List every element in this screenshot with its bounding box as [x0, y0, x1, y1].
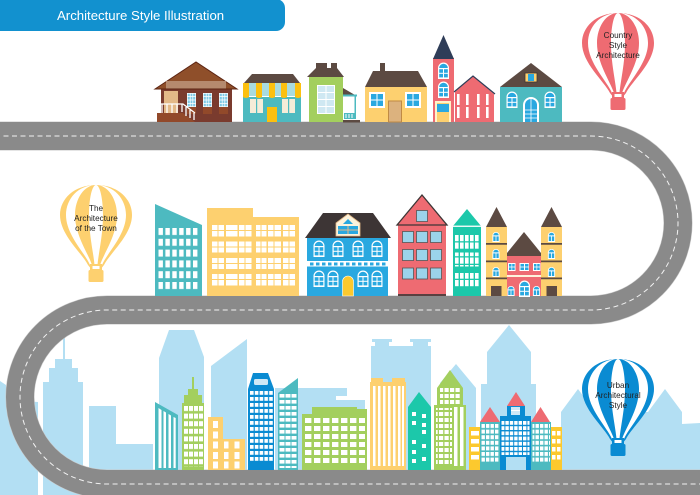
building: teal glass tower: [278, 378, 298, 470]
building: teal slit tower: [155, 402, 178, 470]
building: mint narrow townhouse: [453, 209, 481, 296]
building: green antenna tower: [182, 377, 204, 470]
building: shop with awning: [243, 74, 301, 122]
balloon: the architecture of the town: of the Town: [75, 224, 117, 233]
building: twin-tower castle: [486, 207, 562, 297]
building: blue castle complex: [469, 392, 562, 470]
building: brown bungalow: [155, 62, 237, 122]
building: blue mansion: [305, 213, 391, 296]
balloon: country style architecture: Country: [604, 31, 633, 40]
building: green house with porch: [307, 63, 360, 122]
balloon: urban architectural style: Style: [609, 401, 628, 410]
balloon: the architecture of the town: Architecture: [74, 214, 118, 223]
title banner: [0, 0, 285, 31]
balloon: the architecture of the town: The: [89, 204, 104, 213]
building: yellow cottage: [365, 63, 427, 122]
building: red gabled townhouse: [397, 195, 447, 296]
building: mint pointed tower: [408, 392, 431, 470]
building: church tower with annex: [433, 35, 495, 122]
title banner: Architecture Style Illustration: [57, 8, 224, 23]
building: yellow office block: [207, 208, 299, 296]
road: [0, 136, 700, 484]
building: teal slanted office: [155, 204, 202, 296]
balloon: country style architecture: [582, 13, 654, 110]
building: green wide block: [302, 407, 367, 470]
balloon: urban architectural style: Urban: [607, 381, 630, 390]
building: yellow stepped block: [208, 417, 245, 470]
balloon: the architecture of the town: [60, 185, 132, 282]
building: blue tower: [248, 373, 274, 470]
balloon: country style architecture: Architecture: [596, 51, 640, 60]
building: light green gabled tower: [434, 370, 466, 470]
building: yellow crown tower: [370, 378, 406, 470]
balloon: urban architectural style: Architectural: [595, 391, 641, 400]
balloon: country style architecture: Style: [609, 41, 628, 50]
background skyline: [0, 325, 700, 495]
balloon: urban architectural style: [582, 359, 654, 456]
building: teal house: [500, 63, 562, 122]
